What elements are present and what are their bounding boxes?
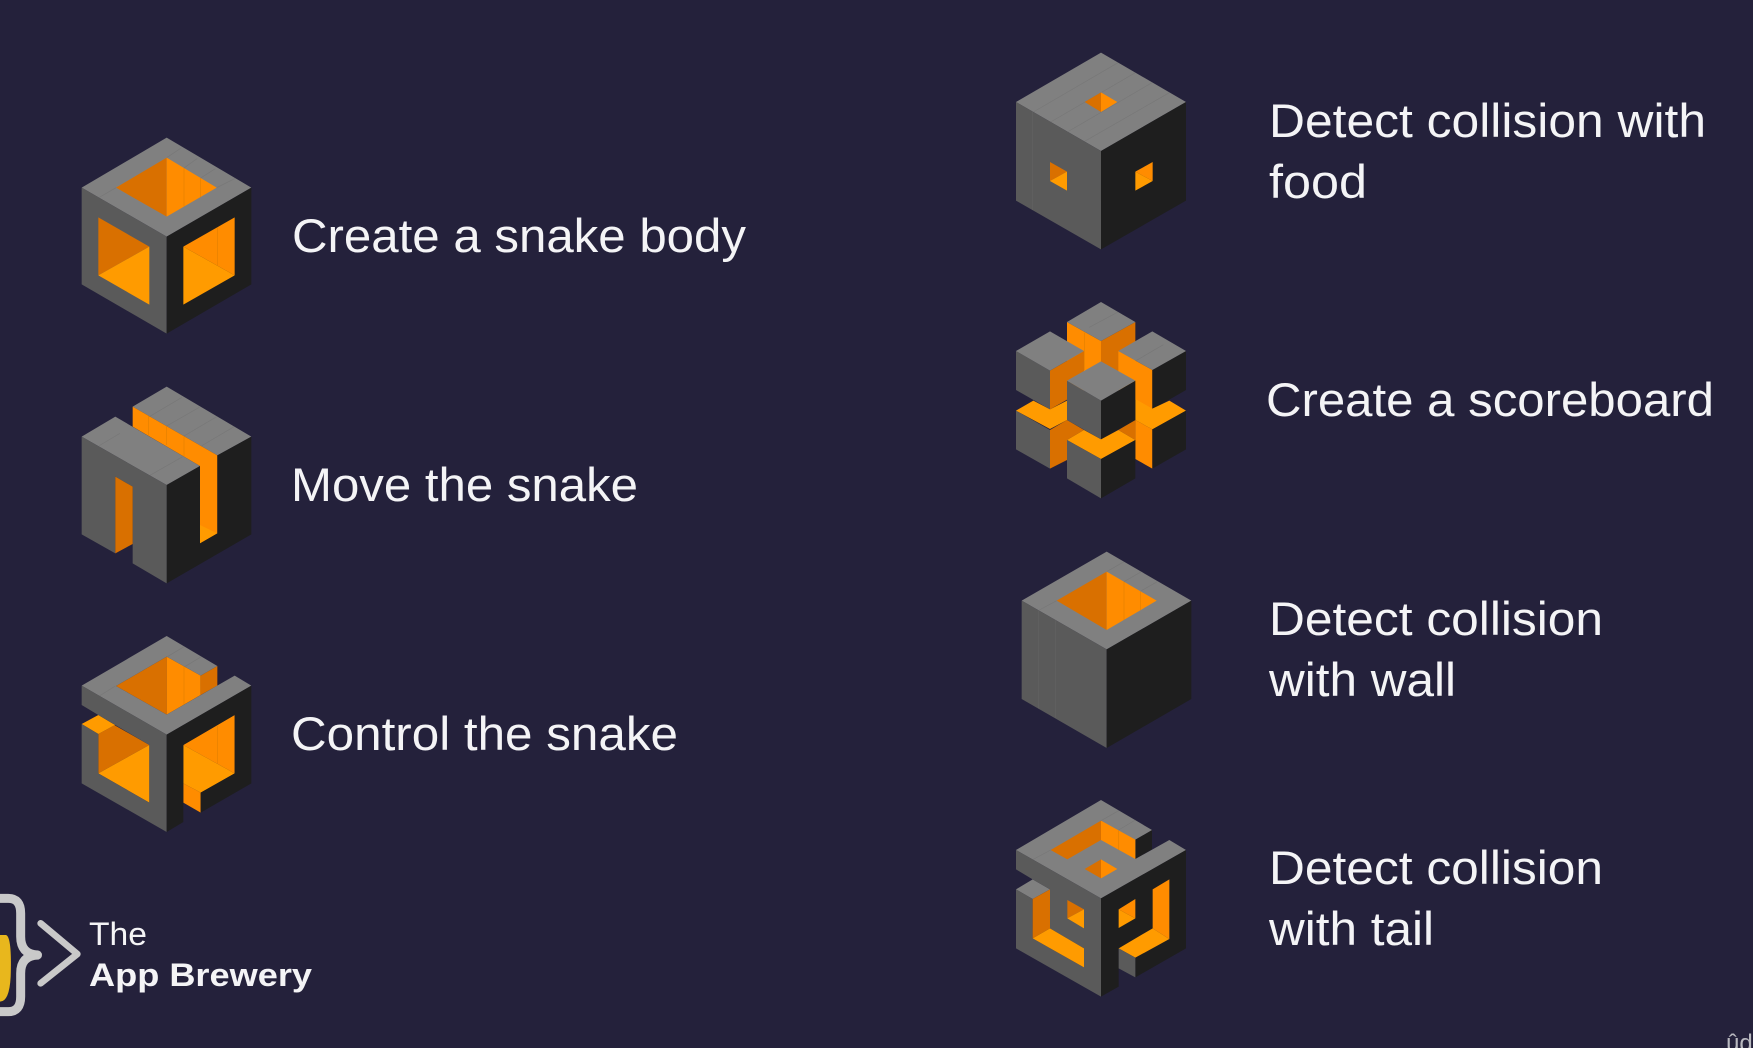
logo wordmark: App Brewery [89, 957, 312, 993]
icon: cube with top hole [1022, 552, 1191, 748]
logo: the app brewery [0, 898, 312, 1012]
row: control the snake [82, 636, 678, 832]
logo wordmark: The [89, 916, 147, 952]
icon: exploded cubes [1016, 302, 1186, 498]
label: with wall [1268, 653, 1456, 706]
icon: cube with small holes [1016, 53, 1186, 249]
logo wordmark [89, 916, 312, 993]
row: move the snake [82, 387, 638, 583]
row: detect collision with food [1016, 53, 1706, 249]
label: Create a scoreboard [1266, 373, 1714, 426]
row: detect collision with tail [1016, 800, 1603, 997]
label: Control the snake [291, 707, 678, 760]
label [1268, 592, 1603, 706]
label: Detect collision with [1269, 94, 1706, 147]
icon: logo brace and chevron [0, 898, 77, 1012]
label: Move the snake [291, 458, 638, 511]
icon: hollow cube [82, 138, 251, 334]
icon: spiral cube [1016, 800, 1186, 997]
label: Detect collision [1269, 592, 1603, 645]
icon: open cube with gaps [82, 636, 251, 832]
label: Detect collision [1269, 841, 1603, 894]
row: create a scoreboard [1016, 302, 1714, 498]
label: with tail [1268, 902, 1434, 955]
label: food [1269, 155, 1367, 208]
label [1269, 94, 1706, 208]
row: create a snake body [82, 138, 747, 334]
row: detect collision with wall [1022, 552, 1603, 748]
label: Create a snake body [292, 209, 747, 262]
label [1268, 841, 1603, 955]
icon: n-shaped block [82, 387, 251, 583]
